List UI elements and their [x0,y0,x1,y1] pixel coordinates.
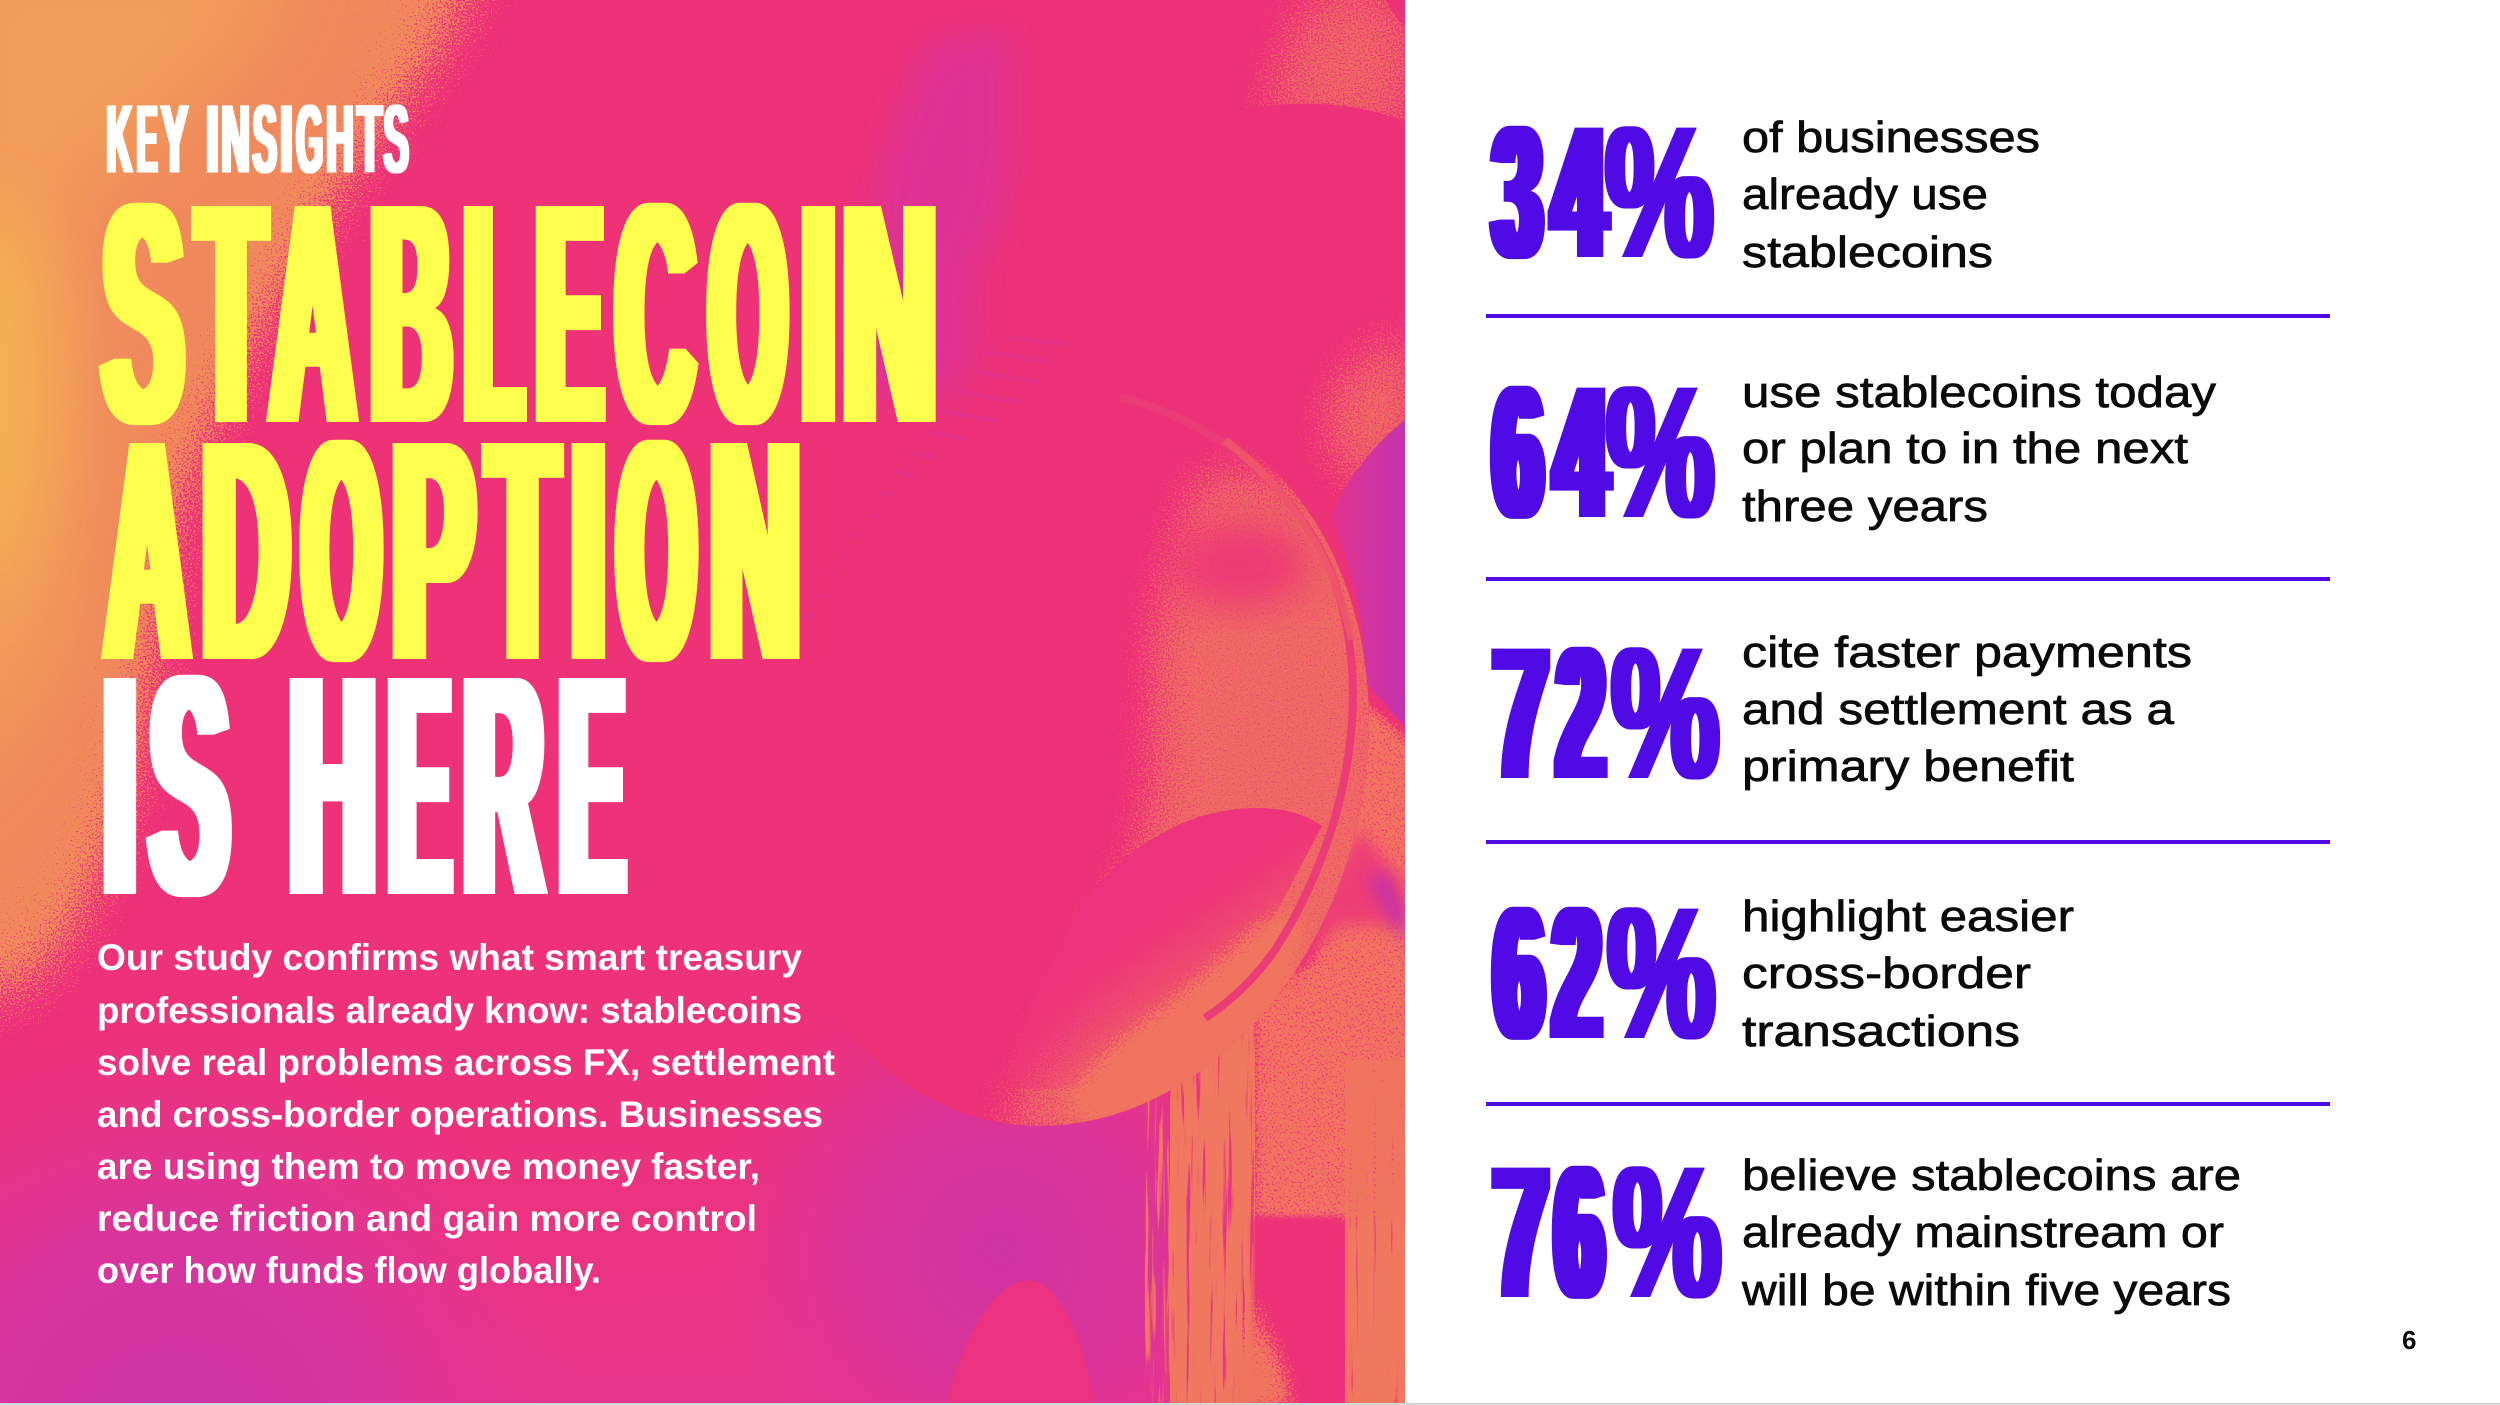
title: stablecoin adoption is here: T [198,138,264,489]
stat: 76%: 6 [1556,1127,1603,1337]
text: S [384,84,409,194]
stat: 64%: three years [1742,482,1988,531]
heading: key insights: S [253,84,277,194]
title: stablecoin adoption is here: O [303,375,380,726]
heading: key insights: I [280,84,293,194]
stat: 76%: believe stablecoins are [1742,1151,2241,1200]
stat: 76% [1494,1127,2241,1337]
heading: key insights: N [221,84,250,194]
stat: 34%: of businesses [1742,113,2040,162]
intro paragraph [97,937,835,1291]
stat: 34% [1494,87,2040,297]
title: stablecoin adoption is here: R [464,610,542,961]
orange lower coin band [1040,900,1320,1140]
coin rim [1120,397,1353,1018]
stat: 72% [1494,608,2192,818]
title: stablecoin adoption is here: A [271,138,354,489]
title: stablecoin adoption is here: B [371,138,451,489]
stat: 72%: 2 [1558,608,1604,818]
stat: 76%: already mainstream or [1742,1208,2224,1257]
piano key stripes [805,338,1070,627]
magenta circle segment right [1331,420,1405,727]
big pink shape [1220,104,1405,186]
stat: 72%: primary benefit [1742,742,2074,791]
title: stablecoin adoption is here: P [392,375,474,726]
pink area beside rim [1290,828,1405,980]
stat: 72%: and settlement as a [1742,685,2175,734]
stat: 62%: highlight easier [1742,892,2074,941]
stat: 76%: will be within five years [1741,1266,2231,1315]
stat: 72%: % [1611,608,1719,818]
stat: 64%: % [1606,347,1714,557]
title: stablecoin adoption is here: C [617,138,694,489]
coin inner crescent [1009,808,1322,1089]
title: stablecoin adoption is here [103,138,936,961]
stat: 64%: or plan to in the next [1742,424,2188,473]
dark pink block [1253,1217,1343,1405]
stat: 62% [1495,868,2074,1078]
stat: 64%: 4 [1555,347,1607,557]
heading: key insights: K [106,84,132,194]
divider [1486,1102,2330,1106]
coin [700,334,1444,1190]
mottled orange right of rim [1250,690,1420,1225]
intro paragraph: over how funds flow globally. [97,1250,601,1291]
top right speckled orange [1207,0,1405,122]
panel: gradient photo background [0,0,1444,1405]
stat: 62%: cross-border [1742,949,2031,998]
title: stablecoin adoption is here: A [106,375,188,726]
stat: 62%: transactions [1742,1007,2020,1056]
title: stablecoin adoption is here: E [537,138,602,489]
intro paragraph: solve real problems across FX, settlement [97,1042,835,1083]
pink dome bottom [947,1280,1095,1405]
title: stablecoin adoption is here: I [802,138,835,489]
intro paragraph: Our study confirms what smart treasury [97,937,802,978]
title: stablecoin adoption is here: E [390,610,449,961]
stat: 62%: % [1607,868,1715,1078]
title: stablecoin adoption is here: L [466,138,522,489]
stat: 76%: % [1613,1127,1721,1337]
divider [1486,840,2330,844]
streaks under coin [1145,1000,1405,1405]
intro paragraph: are using them to move money faster, [97,1146,760,1187]
stat: 34%: 4 [1553,87,1605,297]
heading: key insights: H [326,84,354,194]
bottom edge line [0,1403,2500,1405]
divider [1486,577,2330,581]
divider [1486,314,2330,318]
stat: 34%: % [1605,87,1713,297]
title: stablecoin adoption is here: I [572,375,605,726]
stat: 34%: 3 [1494,87,1541,297]
title: stablecoin adoption is here: T [488,375,557,726]
heading: key insights [106,84,409,194]
heading: key insights: Y [161,84,188,194]
title: stablecoin adoption is here: S [103,138,183,489]
stat: 62%: 2 [1554,868,1600,1078]
magenta triangle right [1368,872,1405,945]
title: stablecoin adoption is here: O [618,375,695,726]
stat: 64%: 6 [1494,347,1542,557]
heading: key insights: I [206,84,219,194]
stat: 34%: already use [1742,170,1988,219]
title: stablecoin adoption is here: S [150,610,228,961]
title: stablecoin adoption is here: H [290,610,376,961]
intro paragraph: reduce friction and gain more control [97,1198,757,1239]
text: N [843,138,936,489]
speckled orange left [0,0,540,1040]
stat: 64%: use stablecoins today [1742,368,2216,417]
stat: 72%: 7 [1494,608,1548,818]
stat: 34%: stablecoins [1742,228,1993,277]
title: stablecoin adoption is here: I [104,610,136,961]
orange fade over block [1230,1250,1305,1405]
heading: key insights: G [296,84,323,194]
heading: key insights: T [357,84,382,194]
shadow patch on coin [1172,523,1308,607]
title: stablecoin adoption is here: O [710,138,786,489]
stat: 62%: 6 [1495,868,1543,1078]
stat: 76%: 7 [1494,1127,1548,1337]
page number: 6 [2402,1325,2416,1355]
title: stablecoin adoption is here: E [560,610,623,961]
magenta blob top [860,30,1012,400]
intro paragraph: professionals already know: stablecoins [97,990,802,1031]
heading: key insights: E [137,84,157,194]
stat: 64% [1494,347,2216,557]
title: stablecoin adoption is here: N [710,375,800,726]
stat: 72%: cite faster payments [1742,628,2192,677]
title: stablecoin adoption is here: D [203,375,289,726]
intro paragraph: and cross-border operations. Businesses [97,1094,823,1135]
